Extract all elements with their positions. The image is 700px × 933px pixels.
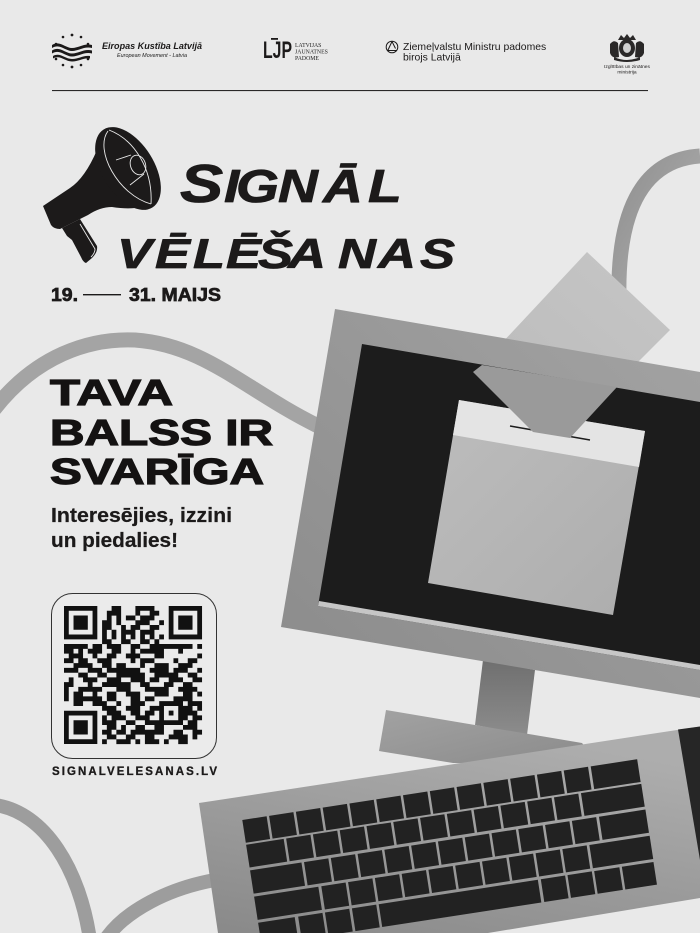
- date dash: [83, 294, 121, 295]
- headline line 1: TAVA: [50, 372, 173, 413]
- monitor base: [379, 710, 600, 765]
- subheading: [51, 504, 232, 552]
- end date: 31. MAIJS: [129, 285, 221, 305]
- LJP name: JAUNATNES: [295, 50, 328, 56]
- QR code: [64, 606, 202, 744]
- computer monitor: [281, 309, 700, 735]
- monitor screen: [318, 344, 700, 670]
- ballot box lid: [453, 400, 645, 467]
- logo subtitle: European Movement - Latvia: [117, 53, 187, 59]
- header logos: [52, 34, 651, 76]
- subheading line 2: un piedalies!: [51, 529, 178, 552]
- logo: Ziemeļvalstu Ministru padomes: [386, 41, 546, 64]
- headline line 3: SVARĪGA: [50, 451, 264, 492]
- logo: Eiropas Kustība Latvijā: [52, 34, 202, 68]
- office name: birojs Latvijā: [403, 52, 461, 64]
- megaphone handle: [62, 219, 97, 263]
- ballot box slot: [510, 426, 590, 440]
- office name: Ziemeļvalstu Ministru padomes: [403, 42, 546, 53]
- keyboard: [199, 726, 700, 933]
- logo: Izglītības un zinātnes ministrija: [604, 34, 651, 76]
- icon: stars and waving flag: [52, 34, 92, 68]
- ministry name: ministrija: [617, 70, 637, 76]
- megaphone icon: [43, 116, 174, 263]
- LJP name: LATVIJAS: [295, 43, 321, 49]
- LJP name: PADOME: [295, 56, 319, 62]
- headline: [50, 372, 273, 492]
- start date: 19.: [51, 285, 78, 305]
- headline line 2: BALSS IR: [50, 412, 273, 453]
- monitor stand: [475, 660, 535, 735]
- ballot paper: upper part: [500, 252, 670, 400]
- LJP bar: [271, 38, 278, 40]
- keyboard keys: [242, 759, 657, 933]
- website address: SIGNALVELESANAS.LV: [52, 766, 217, 778]
- QR code card: [52, 594, 217, 778]
- card outline: [52, 594, 216, 758]
- megaphone white lines: [80, 130, 151, 257]
- monitor frame: [281, 309, 700, 698]
- keyboard body: [199, 726, 700, 933]
- curved cable: bottom left: [0, 805, 215, 933]
- title line 1: SIGNĀL: [180, 153, 402, 214]
- megaphone bell: [82, 116, 174, 221]
- title line 2: VĒLĒŠANAS: [117, 229, 455, 278]
- ministry name: Izglītības un zinātnes: [604, 64, 651, 70]
- QR data modules: [64, 608, 202, 742]
- logo: Latvijas Jaunatnes padome: [263, 37, 328, 64]
- LJP letters: LJP: [263, 37, 292, 64]
- header rule: [52, 90, 648, 91]
- screen lower strip: [318, 601, 700, 670]
- keyboard dark side: [678, 726, 700, 860]
- ballot paper: lower part: [473, 365, 617, 438]
- curved cable: left: [0, 340, 318, 426]
- curved cable: top right: [619, 156, 700, 300]
- QR finder patterns: [64, 606, 202, 744]
- title: Signāl vēlēšanas: [117, 153, 455, 278]
- logo name: Eiropas Kustība Latvijā: [102, 41, 202, 52]
- ballot box body: [428, 400, 645, 615]
- subheading line 1: Interesējies, izzini: [51, 504, 232, 527]
- date range: [51, 285, 221, 305]
- megaphone body: [43, 150, 135, 229]
- icon: circle mark: [386, 41, 398, 53]
- icon: coat of arms: [610, 34, 644, 62]
